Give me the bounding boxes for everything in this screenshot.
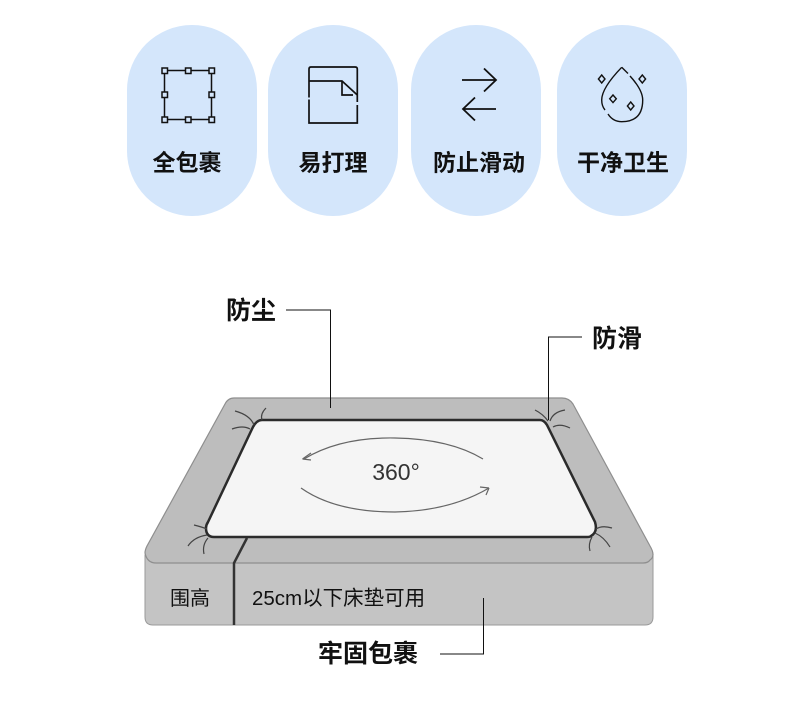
icon: selection frame xyxy=(162,68,214,122)
callout: anti-slip xyxy=(548,325,642,420)
rotation label: 360° xyxy=(372,459,420,485)
panel: full wrap feature xyxy=(127,25,257,216)
mattress side face xyxy=(145,555,653,625)
seam divider xyxy=(234,538,247,625)
rotation arrow: upper xyxy=(302,438,483,460)
callout: secure wrap xyxy=(318,598,484,668)
callout: dustproof xyxy=(226,297,330,408)
label: full wrap: 全包裹 xyxy=(152,150,222,176)
callout: secure wrap: 牢固包裹 xyxy=(318,640,418,668)
panel: anti-slip feature xyxy=(411,25,541,216)
callout: dustproof: 防尘 xyxy=(226,297,276,325)
label: easy care: 易打理 xyxy=(298,150,368,176)
fitted sheet panel xyxy=(206,420,596,537)
icon: document sheet xyxy=(309,67,357,123)
icon: sparkling water drop xyxy=(598,67,646,122)
label: anti-slip: 防止滑动 xyxy=(433,150,525,176)
mattress diagram xyxy=(145,398,653,625)
mattress top face xyxy=(145,398,653,563)
rotation arrow: lower xyxy=(301,487,489,512)
side label: height: 围高 xyxy=(170,587,210,610)
callout: anti-slip: 防滑 xyxy=(592,325,642,353)
label: hygiene: 干净卫生 xyxy=(577,150,669,176)
panel: easy care feature xyxy=(268,25,398,216)
icon: opposing arrows xyxy=(462,68,496,120)
elastic wrinkles xyxy=(188,408,612,554)
side label: mattress size: 25cm以下床垫可用 xyxy=(252,587,425,610)
panel: hygiene feature xyxy=(557,25,687,216)
